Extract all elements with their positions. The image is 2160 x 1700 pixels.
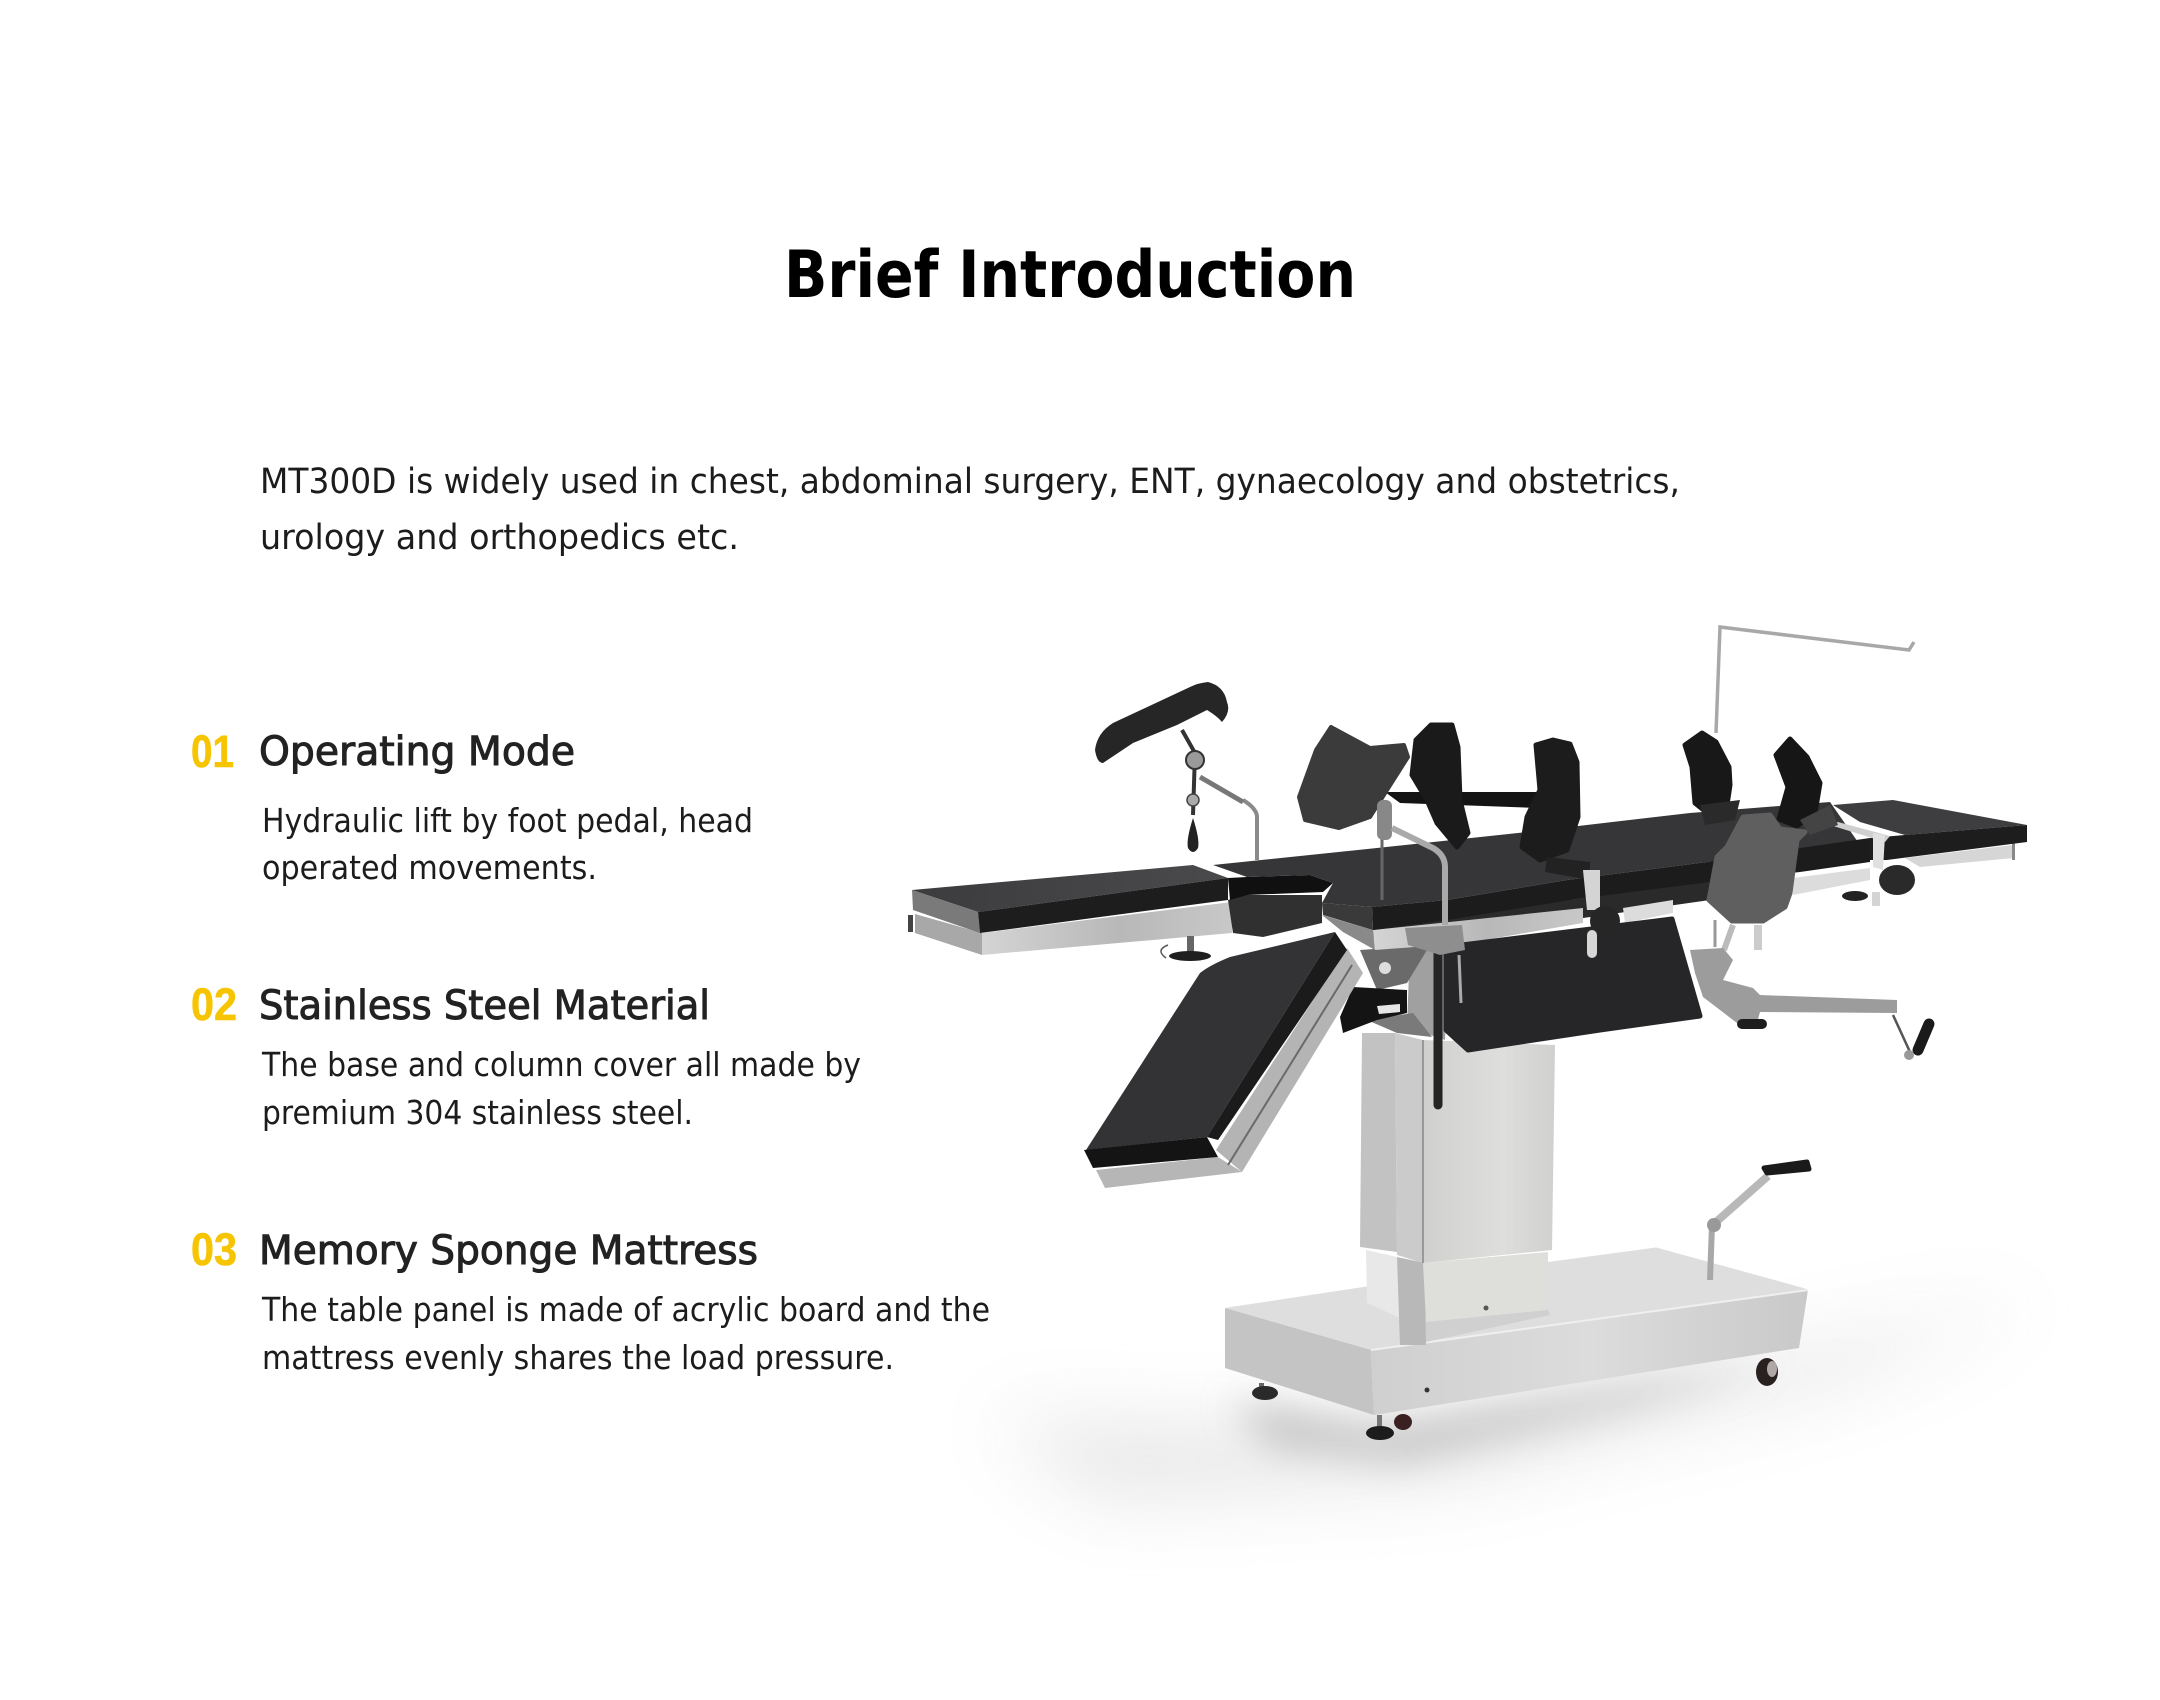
feature 02: stainless steel material [191,979,861,1132]
description: memory sponge mattress [261,1291,990,1377]
description: stainless steel material: premium 304 stainless steel. [262,1094,693,1132]
number 03: 03 [191,1224,237,1275]
heading: operating mode: Operating Mode [259,729,575,775]
description: memory sponge mattress: mattress evenly shares the load pressure. [262,1339,894,1377]
number 02: 02 [191,979,237,1030]
head section cushion with steel frame [908,865,1232,955]
feature 01: operating mode [191,726,753,887]
main table top [1213,802,1870,930]
intro paragraph: urology and orthopedics etc. [260,518,739,558]
description: operating mode: Hydraulic lift by foot pedal, head [262,802,753,840]
operating table illustration [908,627,2040,1500]
leg board lowered [1084,932,1363,1188]
casters and levelling feet [1252,1358,1778,1440]
right crank arm [1690,948,1929,1060]
description: memory sponge mattress: The table panel is made of acrylic board and the [261,1291,990,1329]
column [1360,1033,1555,1345]
hinge block [1228,875,1333,937]
shoulder and body pads [1299,725,1820,860]
floor shadow [990,1300,2040,1500]
description: operating mode [262,802,753,887]
pad mounting clamps [1545,800,1838,880]
description: stainless steel material: The base and column cover all made by [261,1046,861,1084]
lift mechanism under table [1340,940,1450,1040]
gynaecology arm rest with rods [1095,682,1257,860]
number 01: 01 [191,726,234,777]
intro paragraph: MT300D is widely used in chest, abdominal surgery, ENT, gynaecology and obstetrics, [260,462,1680,502]
chrome rods and clamps [1377,800,1915,1105]
anaesthesia screen frame [1716,627,1914,733]
foot section cushion [1830,800,2027,860]
description: operating mode: operated movements. [262,849,597,887]
intro paragraph [260,462,1680,558]
description: stainless steel material [261,1046,861,1132]
head section adjusting knob [1161,936,1211,961]
foot pedal lever [1707,1162,1809,1280]
heading: stainless steel material: Stainless Steel Material [259,983,710,1029]
underside black skirt panel [1446,919,1700,1050]
base [1225,1250,1808,1415]
heading: memory sponge mattress: Memory Sponge Mattress [259,1228,758,1274]
table steel rails [1322,843,2015,950]
support pad legs [1715,920,1758,950]
feature 03: memory sponge mattress [191,1224,990,1377]
title: Brief Introduction [784,238,1356,313]
grey support pad [1709,815,1805,921]
